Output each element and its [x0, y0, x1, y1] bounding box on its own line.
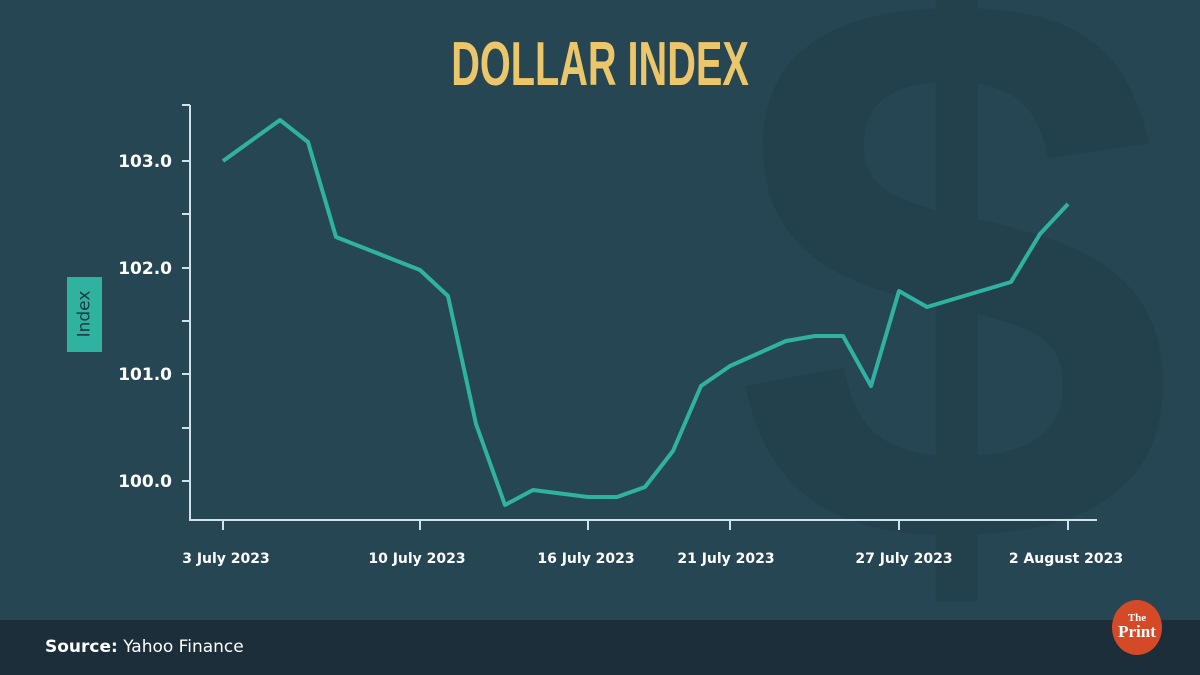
x tick labels	[182, 551, 1123, 567]
y-axis label: Index: Index	[74, 291, 94, 337]
y tick labels: 101.0	[118, 365, 172, 385]
x tick labels: 10 July 2023	[368, 551, 466, 567]
data line	[223, 120, 1068, 505]
y tick labels: 103.0	[118, 152, 172, 172]
source text: Source: Yahoo Finance	[45, 637, 244, 657]
x tick labels: 3 July 2023	[182, 551, 270, 567]
footer	[0, 620, 1200, 675]
y tick labels: 102.0	[118, 259, 172, 279]
title: DOLLAR INDEX	[451, 30, 749, 99]
x tick labels: 27 July 2023	[855, 551, 953, 567]
x tick labels: 2 August 2023	[1009, 551, 1123, 567]
logo: ThePrint	[1112, 600, 1162, 655]
x tick labels: 16 July 2023	[537, 551, 635, 567]
x tick labels: 21 July 2023	[677, 551, 775, 567]
y-axis label: Index	[67, 277, 102, 352]
logo: ThePrint: Print	[1118, 622, 1156, 641]
y tick labels: 100.0	[118, 472, 172, 492]
y tick labels	[118, 152, 172, 492]
logo: ThePrint: The	[1128, 612, 1146, 624]
